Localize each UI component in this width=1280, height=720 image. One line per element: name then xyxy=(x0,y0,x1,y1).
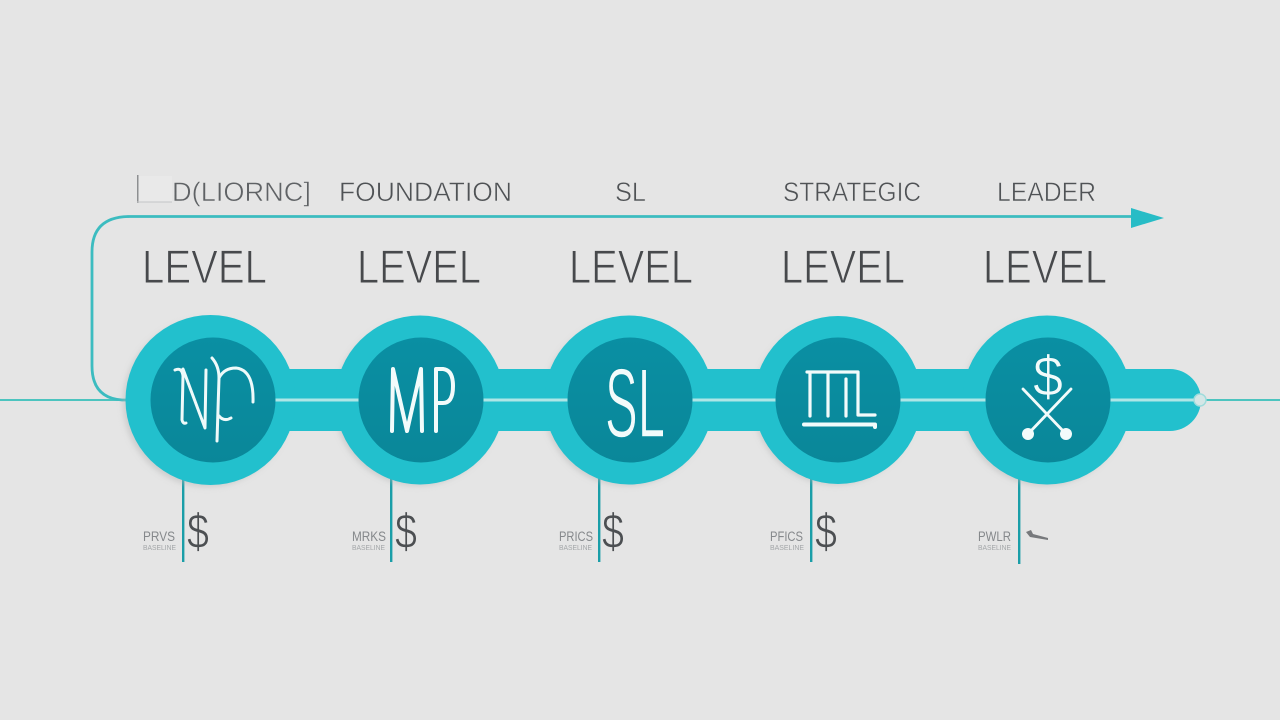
price note 4: PFICS xyxy=(770,529,803,544)
title 3: SL xyxy=(615,177,646,207)
title 2: FOUNDATION xyxy=(339,177,512,207)
price note 3: BASELINE xyxy=(559,545,592,552)
connector highlight line xyxy=(272,398,1200,402)
progress arrow xyxy=(92,208,1164,400)
title 4: STRATEGIC xyxy=(783,177,921,207)
level 2: LEVEL xyxy=(357,240,481,293)
price note 1: PRVS xyxy=(143,529,175,544)
level 4: LEVEL xyxy=(781,240,905,293)
price note 1: BASELINE xyxy=(143,545,176,552)
timeline bar xyxy=(200,369,1201,431)
price note 4 xyxy=(770,505,837,559)
price note 2: BASELINE xyxy=(352,545,385,552)
level 5: LEVEL xyxy=(983,240,1107,293)
stage 3 icon xyxy=(568,338,692,462)
icon text SL: SL xyxy=(605,348,665,458)
price note 4: BASELINE xyxy=(770,545,804,552)
price note 2: $ xyxy=(395,505,417,559)
title 1: D(LIORNC] xyxy=(172,177,311,207)
price note 5: PWLR xyxy=(978,529,1011,544)
vertical stems xyxy=(182,478,1020,564)
price note 2: MRKS xyxy=(352,529,386,544)
level 1: LEVEL xyxy=(142,240,267,293)
level 3: LEVEL xyxy=(569,240,693,293)
price note 3: PRICS xyxy=(559,529,593,544)
stage titles xyxy=(137,175,1096,207)
stage 1 icon xyxy=(150,338,276,462)
price note 2 xyxy=(352,505,417,559)
stage 2 icon xyxy=(358,338,484,462)
price note 5: BASELINE xyxy=(978,545,1011,552)
price note 1 xyxy=(143,505,209,559)
title 5: LEADER xyxy=(997,177,1096,207)
price note 3: $ xyxy=(602,505,624,559)
right baseline xyxy=(1200,399,1280,401)
price note 5 xyxy=(978,529,1048,552)
left baseline xyxy=(0,399,130,401)
outer rings xyxy=(126,315,1132,485)
price note 1: $ xyxy=(187,505,209,559)
level labels xyxy=(142,240,1107,293)
stage 5 icon xyxy=(986,338,1110,462)
end dot xyxy=(1194,394,1206,406)
price note 4: $ xyxy=(815,505,837,559)
dollar sign: $ xyxy=(1033,345,1063,409)
stage 4 icon xyxy=(776,338,900,462)
price note 3 xyxy=(559,505,624,559)
circle shadows xyxy=(123,319,1127,487)
